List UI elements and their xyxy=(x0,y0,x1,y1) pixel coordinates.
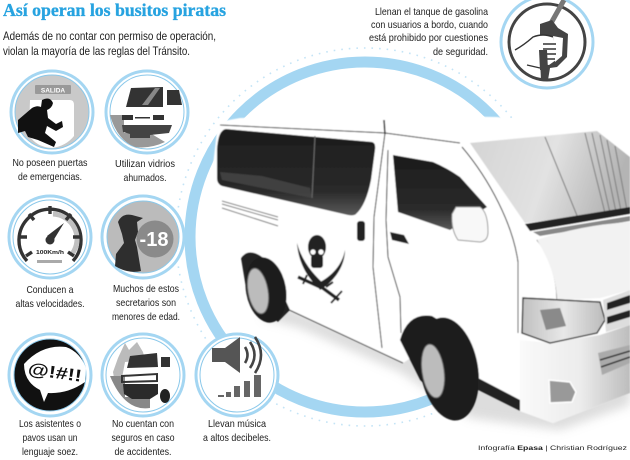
van photograph xyxy=(213,115,630,430)
label: swearing: pavos usan un xyxy=(22,432,78,444)
rear wheel xyxy=(241,252,291,326)
fuel text block: está prohibido por cuestiones xyxy=(369,32,488,44)
intro text: Además de no contar con permiso de operación, xyxy=(3,29,216,43)
label: speedometer xyxy=(16,284,84,310)
label: speedometer: Conducen a xyxy=(26,284,74,296)
label: loud music xyxy=(203,418,271,444)
rear door handle xyxy=(357,221,365,241)
grille xyxy=(603,290,630,332)
icon: loud music xyxy=(196,334,278,416)
label: burning van: seguros en caso xyxy=(112,432,175,444)
label: emergency exit: de emergencias. xyxy=(18,171,82,183)
blue circular ring behind the van xyxy=(176,48,554,426)
rear side window xyxy=(217,129,375,215)
icon: fuel pump nozzle xyxy=(501,0,593,88)
label: burning van: No cuentan con xyxy=(112,418,174,430)
label: swearing: Los asistentes o xyxy=(19,418,81,430)
icon: speedometer: 100Km/h xyxy=(36,250,65,256)
fuel text block: con usuarios a bordo, cuando xyxy=(371,19,488,31)
label: tinted windows xyxy=(115,158,175,184)
label: emergency exit: No poseen puertas xyxy=(12,157,88,169)
icon: emergency exit xyxy=(11,71,93,153)
wiper xyxy=(525,207,630,231)
credit: Infografía Epasa | Christian Rodríguez xyxy=(478,445,627,452)
label: under 18: Muchos de estos xyxy=(113,283,179,295)
label: loud music: Llevan música xyxy=(208,418,266,430)
icon: tinted windows xyxy=(106,71,188,153)
label: swearing: lenguaje soez. xyxy=(22,446,78,458)
fuel text block: de seguridad. xyxy=(433,46,488,58)
label: tinted windows: Utilizan vidrios xyxy=(115,158,175,170)
label: tinted windows: ahumados. xyxy=(124,172,166,184)
label: under 18: menores de edad. xyxy=(112,311,180,323)
front door handle xyxy=(390,232,409,244)
label: emergency exit xyxy=(12,157,88,183)
antenna xyxy=(384,120,385,134)
icon: under 18: -18 xyxy=(140,229,168,251)
label: burning van: de accidentes. xyxy=(114,446,172,458)
icon: emergency exit: SALIDA xyxy=(41,88,65,94)
headlight xyxy=(522,298,605,343)
hood xyxy=(537,222,630,300)
pirate skull and swords xyxy=(297,235,345,303)
label: swearing xyxy=(19,418,81,458)
icon: speedometer xyxy=(9,196,91,278)
ground shadow xyxy=(262,300,630,430)
title: Así operan los busitos piratas xyxy=(3,0,226,20)
label: speedometer: altas velocidades. xyxy=(16,298,84,310)
front bumper shading xyxy=(520,325,630,423)
intro text: violan la mayoría de las reglas del Tránsito. xyxy=(3,44,190,58)
label: burning van xyxy=(112,418,175,458)
icon: under 18 xyxy=(102,196,184,278)
label: under 18 xyxy=(112,283,180,323)
fuel text block: Llenan el tanque de gasolina xyxy=(375,6,488,18)
windscreen xyxy=(470,131,630,223)
lower grille xyxy=(598,345,630,375)
icon: swearing speech bubble: @!#!! xyxy=(27,359,83,386)
icon: swearing speech bubble xyxy=(9,334,91,416)
intro text xyxy=(3,29,216,58)
body lines xyxy=(220,125,557,348)
fog light xyxy=(549,380,576,403)
icon: burning van xyxy=(102,334,184,416)
fuel text block xyxy=(369,6,488,58)
side mirror xyxy=(452,207,488,242)
label: under 18: secretarios son xyxy=(116,297,176,309)
label: loud music: a altos decibeles. xyxy=(203,432,271,444)
van body xyxy=(213,115,630,423)
front wheel xyxy=(400,313,487,425)
front door window xyxy=(393,155,487,230)
